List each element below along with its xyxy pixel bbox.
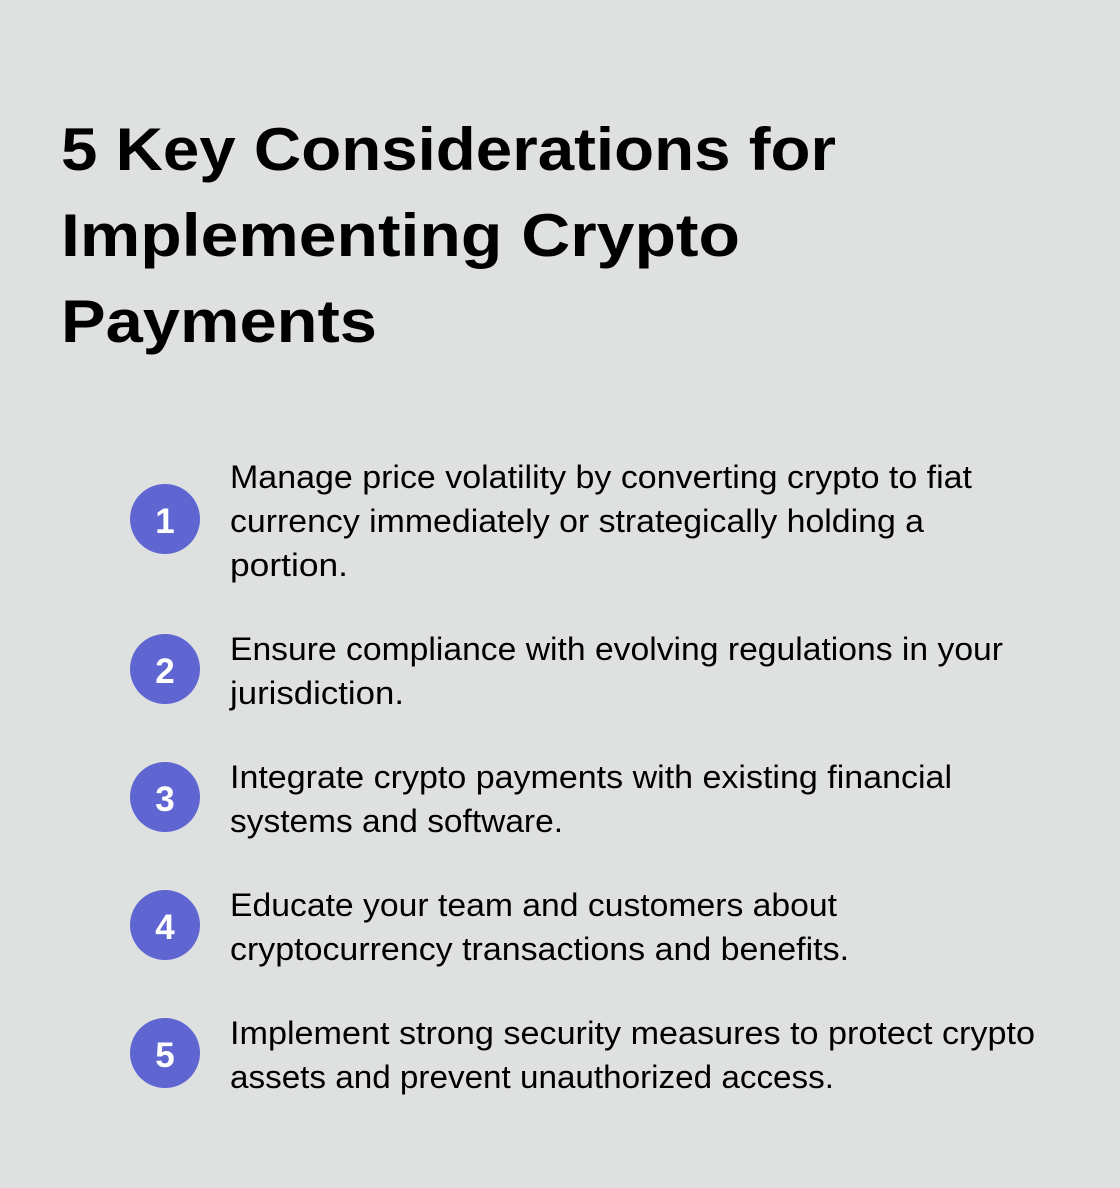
item 2 text: Ensure compliance with evolving regulations in your [230, 631, 1003, 667]
item 5 text: assets and prevent unauthorized access. [230, 1059, 834, 1095]
item 4 [130, 887, 849, 967]
title: Payments [61, 288, 377, 355]
item 1 text: Manage price volatility by converting crypto to fiat [230, 459, 972, 495]
title: Implementing Crypto [61, 202, 740, 269]
item 3 [130, 759, 952, 839]
item 3 text: systems and software. [230, 803, 563, 839]
item 1 text [230, 459, 972, 583]
title [61, 116, 836, 355]
number badge 2: 2 [155, 652, 175, 691]
item 2 text [229, 631, 1003, 711]
number badge 1 [130, 484, 200, 554]
title: 5 Key Considerations for [61, 116, 836, 183]
item 1 [130, 459, 972, 583]
number badge 5: 5 [155, 1036, 175, 1075]
number badge 3 [130, 762, 200, 832]
item 4 text [230, 887, 849, 967]
number badge 5 [130, 1018, 200, 1088]
item 5 text: Implement strong security measures to protect crypto [230, 1015, 1035, 1051]
item 5 [130, 1015, 1035, 1095]
number badge 1: 1 [155, 502, 175, 541]
number badge 3: 3 [155, 780, 175, 819]
item 4 text: cryptocurrency transactions and benefits. [230, 931, 849, 967]
number badge 4 [130, 890, 200, 960]
item 2 [130, 631, 1003, 711]
item 5 text [230, 1015, 1035, 1095]
item 4 text: Educate your team and customers about [230, 887, 837, 923]
number badge 4: 4 [155, 908, 175, 947]
item 3 text [230, 759, 952, 839]
item 3 text: Integrate crypto payments with existing financial [230, 759, 952, 795]
item 2 text: jurisdiction. [229, 675, 404, 711]
item 1 text: portion. [230, 547, 348, 583]
number badge 2 [130, 634, 200, 704]
item 1 text: currency immediately or strategically holding a [230, 503, 924, 539]
